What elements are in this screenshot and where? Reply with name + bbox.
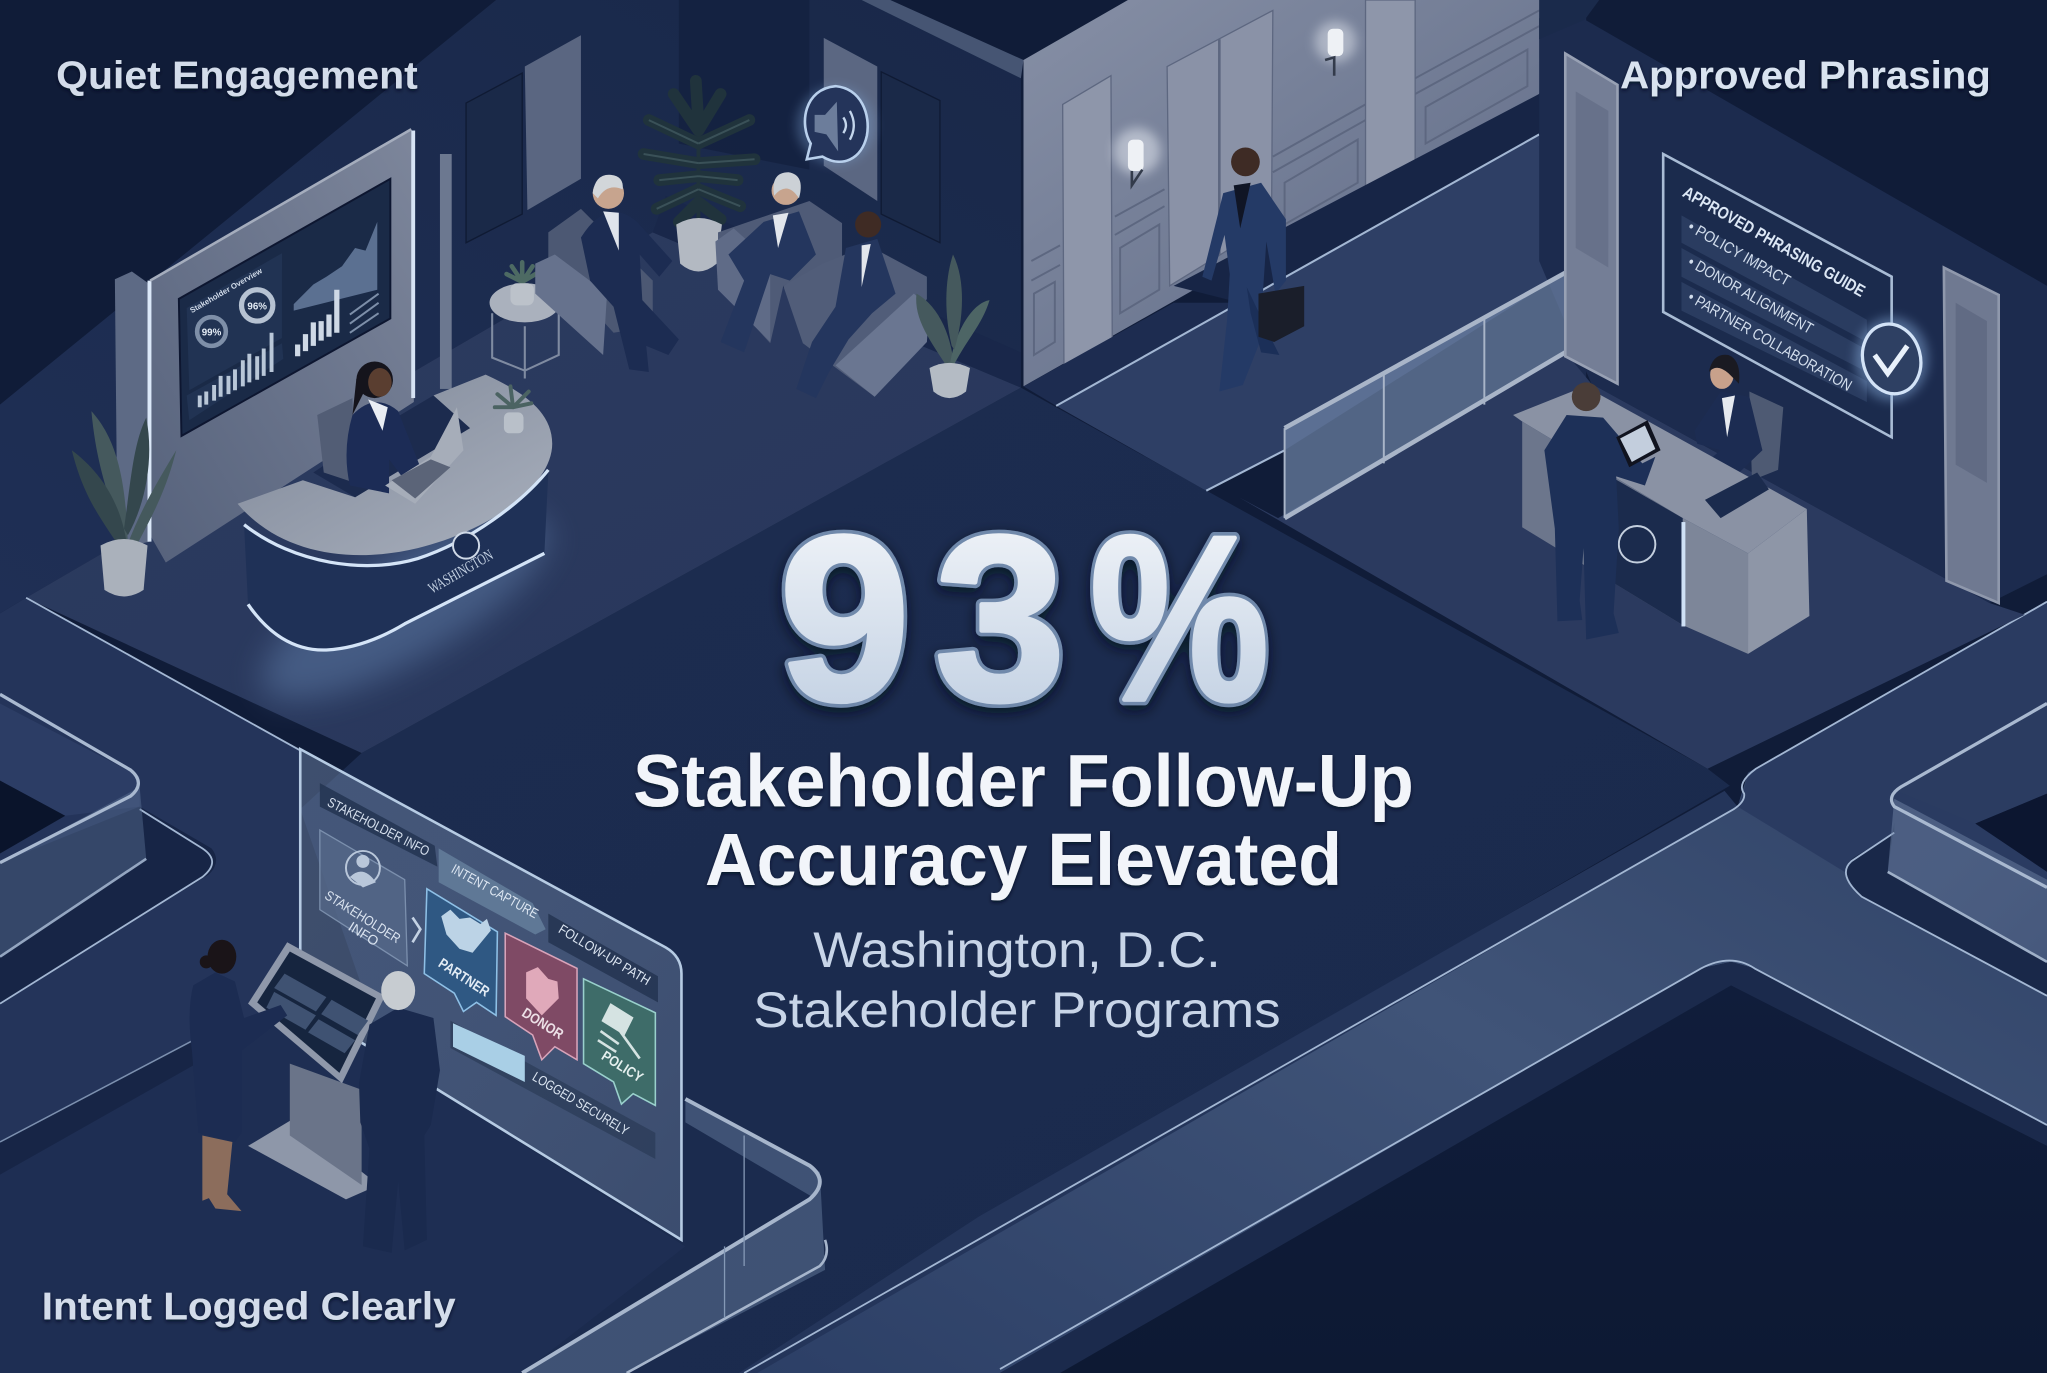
walkway: diagonal lower right: [739, 602, 2047, 1373]
desk seal: [1619, 526, 1655, 563]
woman: [721, 172, 816, 352]
donut 96: 96%: [247, 301, 267, 312]
right room wall: [1539, 0, 2047, 603]
right lounge plant: [916, 255, 990, 398]
desk front: [244, 472, 548, 650]
phrasing guide panel: [1663, 154, 1929, 437]
headline fill: %: [1090, 487, 1269, 750]
dashboard screen: [179, 179, 390, 436]
chair C: [783, 245, 930, 397]
logged securely bar: [450, 1021, 655, 1159]
seal: [453, 532, 479, 559]
label: quiet engagement: Quiet Engagement: [56, 55, 418, 98]
headline outline: 9: [779, 487, 910, 750]
headline fill: [779, 487, 1269, 750]
subtitle: [753, 922, 1281, 1038]
chair B: [715, 201, 842, 343]
tab: intent capture: [439, 848, 546, 934]
chair A: [535, 209, 653, 355]
headline outline: 3: [935, 487, 1065, 750]
chair: [317, 398, 355, 483]
receptionist: [347, 362, 420, 493]
donut 99: [197, 317, 226, 346]
tab: stakeholder info: STAKEHOLDER INFO: [325, 795, 432, 859]
desk wordmark: WASHINGTON: [426, 547, 496, 597]
lower left platform floor: [0, 1005, 685, 1373]
card: policy: POLICY: [598, 1048, 646, 1086]
small bar chart: [298, 290, 337, 356]
guide heading: APPROVED PHRASING GUIDE: [1679, 183, 1868, 301]
third person: [796, 211, 896, 398]
left lounge wall: [0, 0, 1021, 613]
label: approved phrasing: Approved Phrasing: [1620, 55, 1991, 98]
seated clerk: [1695, 355, 1783, 486]
desk plant: [495, 386, 531, 407]
subtitle line 2: Stakeholder Programs: [753, 982, 1281, 1038]
glass railing: [1285, 273, 1565, 518]
donut 96: [242, 290, 273, 321]
glass intent panel: [300, 749, 681, 1240]
monitor wall panel: [115, 129, 452, 563]
icon: quiet speech bubble: [796, 86, 875, 164]
headline fill: 3: [935, 487, 1065, 750]
acoustic wall panels: [466, 35, 940, 243]
kiosk: [248, 942, 385, 1199]
lounge wall shading: [653, 0, 1021, 388]
subtitle line 1: Washington, D.C.: [813, 922, 1221, 978]
logged securely bar: LOGGED SECURELY: [530, 1069, 632, 1138]
title line 1: Stakeholder Follow-Up: [633, 740, 1414, 823]
left rail pit: [0, 694, 216, 1004]
card: donor: DONOR: [519, 1005, 566, 1043]
clerk desk: [1513, 386, 1809, 654]
seated people: [581, 172, 896, 398]
walkway edge lines: [744, 602, 2047, 1373]
donut 99: 99%: [202, 327, 222, 338]
desk glow lines: [244, 470, 548, 650]
standing visitor: [1544, 382, 1661, 640]
title: [633, 740, 1414, 901]
left walkway floor: [0, 598, 300, 1175]
headline fill: 9: [779, 487, 910, 750]
card: policy: [584, 979, 655, 1105]
folder: [1705, 472, 1769, 518]
pilasters: [1063, 0, 1415, 371]
tab: intent capture: INTENT CAPTURE: [449, 861, 541, 921]
desk top: [238, 375, 552, 555]
laptop: [385, 407, 463, 504]
woman at kiosk: [190, 940, 287, 1211]
lower floor band: [0, 1039, 235, 1175]
headline outline: [779, 487, 1269, 750]
icon: checkmark badge: [1855, 317, 1929, 401]
right railing: [1846, 703, 2047, 996]
headline 93%: [779, 487, 1269, 750]
left room carpet: [26, 232, 1021, 753]
right room pilasters: [1565, 54, 1999, 603]
card: stakeholder info: INFO: [346, 919, 381, 949]
glass railing lower: [522, 1099, 827, 1373]
corridor floor: [1024, 0, 1586, 491]
kiosk buttons: [266, 974, 368, 1053]
card: stakeholder info: [320, 830, 407, 966]
side table: [490, 262, 560, 378]
palm plant: [644, 81, 755, 271]
area chart: [294, 222, 377, 311]
title line 2: Accuracy Elevated: [705, 818, 1342, 901]
left plant: [72, 411, 176, 596]
wall mouldings: [1031, 10, 1539, 355]
handshake icon: [441, 910, 491, 953]
card: donor: [505, 933, 577, 1060]
armchairs: [535, 201, 930, 397]
lower right pit: [1000, 962, 2047, 1373]
corridor wall: [1024, 0, 1567, 386]
guide item 1: • POLICY IMPACT: [1685, 218, 1793, 290]
central floor diamond: [300, 388, 1730, 1373]
card: stakeholder info: STAKEHOLDER: [322, 888, 403, 946]
dashboard title: Stakeholder Overview: [188, 266, 265, 315]
right room carpet: [1239, 352, 2025, 769]
bar chart: [200, 333, 272, 407]
headline outline: %: [1090, 487, 1269, 750]
reception desk: [237, 362, 572, 734]
arrow: [413, 918, 420, 942]
tablet: [1616, 420, 1661, 467]
briefcase: [1258, 286, 1304, 342]
card: partner: PARTNER: [435, 956, 493, 1001]
man at kiosk: [359, 971, 440, 1253]
top strip of left wall: [862, 0, 1024, 78]
guide item 2: • DONOR ALIGNMENT: [1685, 254, 1816, 338]
sconces: [1114, 21, 1356, 185]
gavel icon: [598, 1005, 640, 1058]
tab: follow-up path: FOLLOW-UP PATH: [556, 922, 653, 988]
guide item 3: • PARTNER COLLABORATION: [1685, 289, 1854, 395]
man: [581, 175, 679, 372]
door: [1167, 10, 1273, 286]
donor hands icon: [526, 967, 559, 1015]
label: intent logged clearly: Intent Logged Clearly: [42, 1285, 456, 1328]
corridor walker: [1202, 147, 1304, 392]
desk floor glow: [237, 480, 572, 734]
card: partner: [424, 889, 497, 1015]
